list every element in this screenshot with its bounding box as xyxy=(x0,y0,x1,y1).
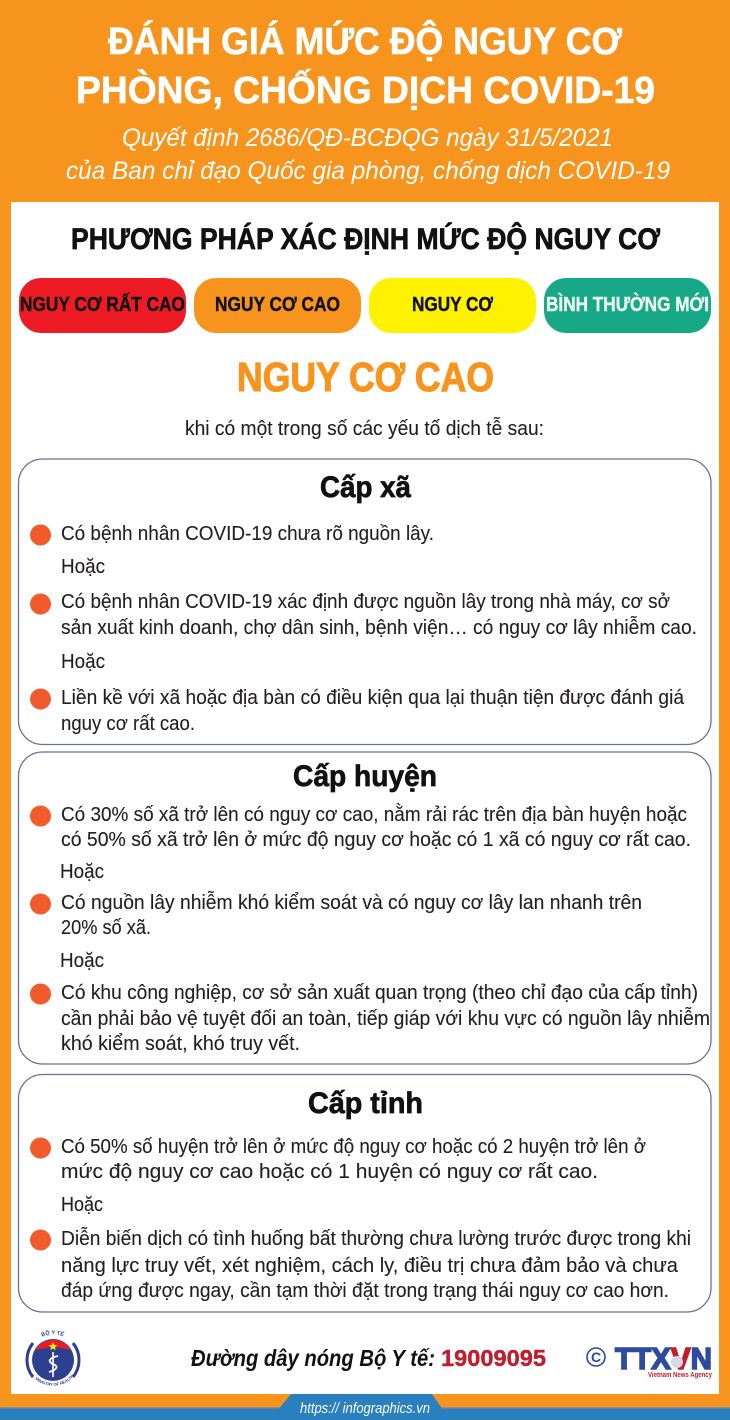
district criteria text: Có 30% số xã trở lên có nguy cơ cao, nằm rải rác trên địa bàn huyện hoặc xyxy=(61,803,687,826)
title: PHÒNG, CHỐNG DỊCH COVID-19 xyxy=(76,67,655,112)
province criteria text xyxy=(61,1136,691,1302)
subtitle xyxy=(66,124,670,185)
district criteria text: Hoặc xyxy=(60,861,104,883)
footer: website band xyxy=(0,1394,730,1420)
icon: TTXVN logo: Vietnam News Agency xyxy=(648,1370,713,1379)
icon: ministry of health logo xyxy=(26,1330,80,1386)
hotline text: Đường dây nóng Bộ Y tế: xyxy=(191,1345,435,1371)
icon: copyright symbol xyxy=(587,1348,605,1366)
heading: method: PHƯƠNG PHÁP XÁC ĐỊNH MỨC ĐỘ NGUY CƠ xyxy=(71,222,660,256)
risk pill: very high: NGUY CƠ RẤT CAO xyxy=(20,293,185,316)
bullet dots xyxy=(30,806,51,1004)
commune criteria text: Có bệnh nhân COVID-19 xác định được nguồn lây trong nhà máy, cơ sở xyxy=(61,591,670,613)
panel heading: province: Cấp tỉnh xyxy=(308,1087,423,1120)
district criteria text: Có khu công nghiệp, cơ sở sản xuất quan trọng (theo chỉ đạo của cấp tỉnh) xyxy=(61,982,698,1004)
district criteria text: 20% số xã. xyxy=(61,917,151,939)
risk pill: new normal xyxy=(544,278,711,333)
title xyxy=(76,18,655,112)
district criteria text: Có nguồn lây nhiễm khó kiểm soát và có nguy cơ lây lan nhanh trên xyxy=(61,891,642,914)
risk pill: high: NGUY CƠ CAO xyxy=(215,294,340,316)
province criteria text: mức độ nguy cơ cao hoặc có 1 huyện có nguy cơ rất cao. xyxy=(61,1161,598,1183)
risk pill: risk xyxy=(369,278,536,333)
icon: copyright symbol: C xyxy=(591,1349,601,1365)
commune criteria text: sản xuất kinh doanh, chợ dân sinh, bệnh viện… có nguy cơ lây nhiễm cao. xyxy=(61,616,697,639)
heading: high risk: NGUY CƠ CAO xyxy=(237,354,494,400)
district criteria text xyxy=(60,803,710,1055)
icon: ministry of health logo: MINISTRY OF HEALTH xyxy=(35,1374,73,1386)
panel: province level xyxy=(18,1074,711,1312)
commune criteria text: nguy cơ rất cao. xyxy=(61,713,195,735)
district criteria text: khó kiểm soát, khó truy vết. xyxy=(61,1033,300,1055)
province criteria text: đáp ứng được ngay, cần tạm thời đặt trong trạng thái nguy cơ cao hơn. xyxy=(61,1280,669,1302)
panel heading: commune: Cấp xã xyxy=(320,471,411,504)
district criteria text: Hoặc xyxy=(60,950,104,972)
commune criteria text: Hoặc xyxy=(61,556,105,578)
hotline text: 19009095 xyxy=(441,1345,546,1371)
panel: commune level xyxy=(18,459,711,744)
intro text: khi có một trong số các yếu tố dịch tễ sau: xyxy=(185,417,544,440)
bullet dots xyxy=(30,1138,51,1250)
district criteria text: cần phải bảo vệ tuyệt đối an toàn, tiếp giáp với khu vực có nguồn lây nhiễm xyxy=(61,1007,710,1030)
district criteria text: có 50% số xã trở lên ở mức độ nguy cơ hoặc có 1 xã có nguy cơ rất cao. xyxy=(61,829,691,851)
bullet dots xyxy=(30,524,51,710)
commune criteria text: Hoặc xyxy=(61,651,105,673)
province criteria text: Có 50% số huyện trở lên ở mức độ nguy cơ hoặc có 2 huyện trở lên ở xyxy=(61,1136,646,1158)
title: ĐÁNH GIÁ MỨC ĐỘ NGUY CƠ xyxy=(108,18,623,63)
risk pill: risk: NGUY CƠ xyxy=(412,294,494,316)
commune criteria text: Có bệnh nhân COVID-19 chưa rõ nguồn lây. xyxy=(61,523,434,545)
commune criteria text: Liền kề với xã hoặc địa bàn có điều kiện qua lại thuận tiện được đánh giá xyxy=(61,687,685,709)
panel heading: district: Cấp huyện xyxy=(293,760,437,793)
subtitle: Quyết định 2686/QĐ-BCĐQG ngày 31/5/2021 xyxy=(122,124,613,152)
province criteria text: Diễn biến dịch có tình huống bất thường chưa lường trước được trong khi xyxy=(61,1227,691,1250)
risk pill: new normal: BÌNH THƯỜNG MỚI xyxy=(546,292,709,316)
panel: district level xyxy=(18,752,711,1064)
footer: website band: https:// infographics.vn xyxy=(300,1400,430,1417)
icon: TTXVN logo: TTXVN xyxy=(615,1341,712,1376)
province criteria text: Hoặc xyxy=(61,1194,103,1216)
risk pill: very high xyxy=(19,278,186,333)
province criteria text: năng lực truy vết, xét nghiệm, cách ly, điều trị chưa đảm bảo và chưa xyxy=(61,1255,679,1277)
subtitle: của Ban chỉ đạo Quốc gia phòng, chống dịch COVID-19 xyxy=(66,157,670,185)
risk pill: high xyxy=(194,278,361,333)
icon: ministry of health logo: BỘ Y TẾ xyxy=(41,1330,65,1336)
commune criteria text xyxy=(61,523,697,735)
